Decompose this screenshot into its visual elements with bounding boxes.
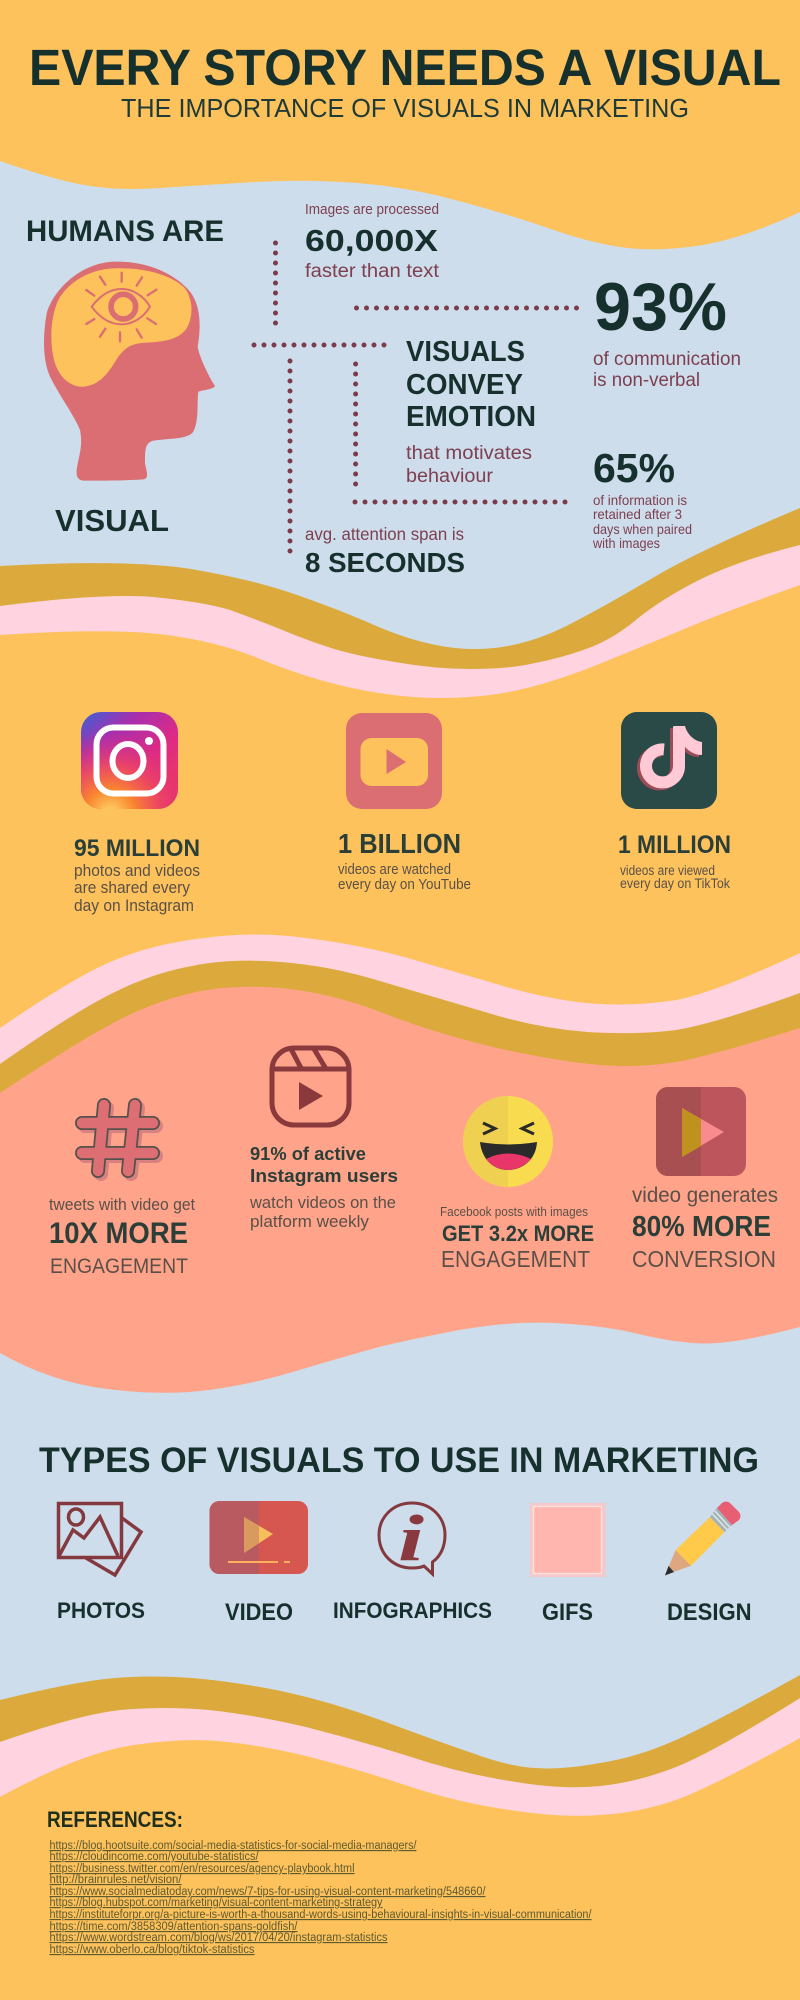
panel: facebook engagement xyxy=(440,1096,594,1272)
stat: 65%: retained after 3 xyxy=(593,506,682,522)
stat: 93% xyxy=(593,269,741,391)
panel: twitter engagement: tweets with video get xyxy=(49,1196,195,1214)
stat: visuals convey emotion: that motivates xyxy=(406,443,532,464)
panel: facebook engagement: Facebook posts with images xyxy=(440,1204,588,1219)
wave: gold band three xyxy=(0,1675,800,1900)
item: video xyxy=(210,1501,308,1626)
item: infographics: INFOGRAPHICS xyxy=(333,1598,492,1623)
stat: 65%: 65% xyxy=(593,445,675,491)
item: gifs xyxy=(530,1503,606,1626)
panel: youtube stat: 1 BILLION xyxy=(338,828,461,859)
panel: youtube stat xyxy=(338,713,471,893)
panel: twitter engagement xyxy=(49,1105,195,1278)
panel: tiktok stat xyxy=(618,712,731,891)
heading: humans are: HUMANS ARE xyxy=(26,215,224,248)
panel: instagram stat xyxy=(74,712,200,915)
item: infographics xyxy=(333,1502,492,1623)
heading: references: REFERENCES: xyxy=(47,1807,183,1832)
panel: humans are visual xyxy=(26,215,224,538)
panel: instagram reels: watch videos on the xyxy=(249,1193,396,1212)
reference links: https://blog.hootsuite.com/social-media-statistics-for-social-media-managers/ xyxy=(50,1840,417,1852)
stat: 65%: with images xyxy=(592,535,660,551)
stat: visuals convey emotion: behaviour xyxy=(406,466,494,487)
icon: info speech bubble: i xyxy=(398,1502,425,1575)
panel: facebook engagement: GET 3.2x MORE xyxy=(442,1221,594,1246)
reference links: https://www.oberlo.ca/blog/tiktok-statistics xyxy=(50,1944,255,1956)
wave: blue section one xyxy=(0,161,800,740)
item: photos: PHOTOS xyxy=(57,1598,145,1623)
stat: 93%: 93% xyxy=(594,269,727,345)
title block xyxy=(29,39,781,123)
panel: video conversion: CONVERSION xyxy=(632,1246,776,1272)
panel: tiktok stat: 1 MILLION xyxy=(618,831,731,859)
icon: head with eye in brain xyxy=(44,262,215,481)
wave: orange footer xyxy=(0,1738,800,2000)
icon: laughing emoji xyxy=(463,1096,553,1187)
icon: gif placeholder xyxy=(530,1503,606,1577)
icon: reels xyxy=(272,1048,349,1125)
reference links: https://www.wordstream.com/blog/ws/2017/04/20/instagram-statistics xyxy=(50,1932,388,1944)
item: design: DESIGN xyxy=(667,1599,752,1626)
stat: 60,000X: 60,000X xyxy=(305,223,438,258)
panel: instagram reels xyxy=(249,1048,398,1231)
dotted connector lines xyxy=(254,243,580,555)
stat: 8 seconds: 8 SECONDS xyxy=(305,547,465,578)
wave: pink band one xyxy=(0,545,800,740)
reference links: https://cloudincome.com/youtube-statistics/ xyxy=(50,1851,259,1863)
panel: youtube stat: videos are watched xyxy=(338,862,451,878)
panel: tiktok stat: every day on TikTok xyxy=(620,876,730,891)
stat: 65%: of information is xyxy=(593,492,687,508)
stat: 60,000X xyxy=(305,202,440,282)
panel: instagram stat: photos and videos xyxy=(74,861,200,880)
icon: video player xyxy=(210,1501,308,1574)
icon: info speech bubble xyxy=(379,1502,445,1575)
main title: EVERY STORY NEEDS A VISUAL xyxy=(29,39,781,96)
panel: video conversion: 80% MORE xyxy=(632,1211,771,1243)
stat: 65% xyxy=(592,445,692,551)
panel: instagram reels: platform weekly xyxy=(250,1212,369,1231)
heading: types of visuals: TYPES OF VISUALS TO USE IN MARKETING xyxy=(39,1441,759,1480)
heading: visual: VISUAL xyxy=(55,503,169,538)
icon: video play card xyxy=(656,1087,746,1176)
reference links: https://blog.hubspot.com/marketing/visual-content-marketing-strategy xyxy=(50,1897,383,1909)
icon: tiktok xyxy=(621,712,717,809)
panel: instagram reels: Instagram users xyxy=(250,1165,398,1186)
panel: twitter engagement: 10X MORE xyxy=(49,1217,188,1250)
panel: twitter engagement: ENGAGEMENT xyxy=(50,1255,188,1278)
icon: photos xyxy=(58,1504,141,1575)
stat: 8 seconds: avg. attention span is xyxy=(305,524,464,544)
wave: salmon section xyxy=(0,987,800,1420)
wave: orange social section xyxy=(0,585,800,1200)
subtitle: THE IMPORTANCE OF VISUALS IN MARKETING xyxy=(121,93,689,123)
panel: facebook engagement: ENGAGEMENT xyxy=(441,1246,590,1272)
stat: 65%: days when paired xyxy=(593,521,692,537)
panel: instagram stat: day on Instagram xyxy=(74,896,194,915)
reference links: http://brainrules.net/vision/ xyxy=(50,1874,182,1886)
icon: instagram xyxy=(81,712,178,809)
wave: gold band one xyxy=(0,508,800,740)
item: photos xyxy=(57,1504,145,1623)
panel: youtube stat: every day on YouTube xyxy=(338,877,471,893)
stat: visuals convey emotion: EMOTION xyxy=(406,401,536,433)
icon: pencil xyxy=(665,1502,740,1576)
panel: video conversion: video generates xyxy=(632,1184,778,1207)
reference links: https://time.com/3858309/attention-spans-goldfish/ xyxy=(50,1921,298,1933)
wave: blue section two xyxy=(0,1323,800,1900)
reference links: https://instituteforpr.org/a-picture-is-worth-a-thousand-words-using-behavioural-insights-in-visual-communication/ xyxy=(50,1909,592,1921)
panel: tiktok stat: videos are viewed xyxy=(620,863,715,878)
reference links: https://www.socialmediatoday.com/news/7-tips-for-using-visual-content-marketing/548660/ xyxy=(50,1886,486,1898)
wave: pink band three xyxy=(0,1698,800,1900)
stat: 60,000X: Images are processed xyxy=(305,202,439,218)
stat: 93%: of communication xyxy=(593,349,741,370)
wave: pink band two xyxy=(0,934,800,1200)
icon: youtube xyxy=(346,713,442,809)
reference links: https://business.twitter.com/en/resources/agency-playbook.html xyxy=(50,1863,354,1875)
stat: 8 seconds xyxy=(305,524,465,578)
item: video: VIDEO xyxy=(225,1599,293,1626)
item: design xyxy=(665,1502,752,1626)
panel: instagram stat: are shared every xyxy=(74,878,190,897)
wave: gold band two xyxy=(0,961,800,1200)
icon: hashtag xyxy=(82,1105,156,1174)
item: gifs: GIFS xyxy=(542,1599,593,1626)
stat: visuals convey emotion: CONVEY xyxy=(406,369,523,401)
stat: visuals convey emotion xyxy=(406,336,536,487)
stat: 93%: is non-verbal xyxy=(593,370,700,391)
stat: visuals convey emotion: VISUALS xyxy=(406,336,525,368)
panel: instagram stat: 95 MILLION xyxy=(74,835,200,862)
panel: video conversion xyxy=(632,1087,778,1272)
panel: instagram reels: 91% of active xyxy=(250,1143,366,1164)
references block xyxy=(47,1807,592,1956)
stat: 60,000X: faster than text xyxy=(305,261,440,282)
reference links xyxy=(50,1840,592,1956)
